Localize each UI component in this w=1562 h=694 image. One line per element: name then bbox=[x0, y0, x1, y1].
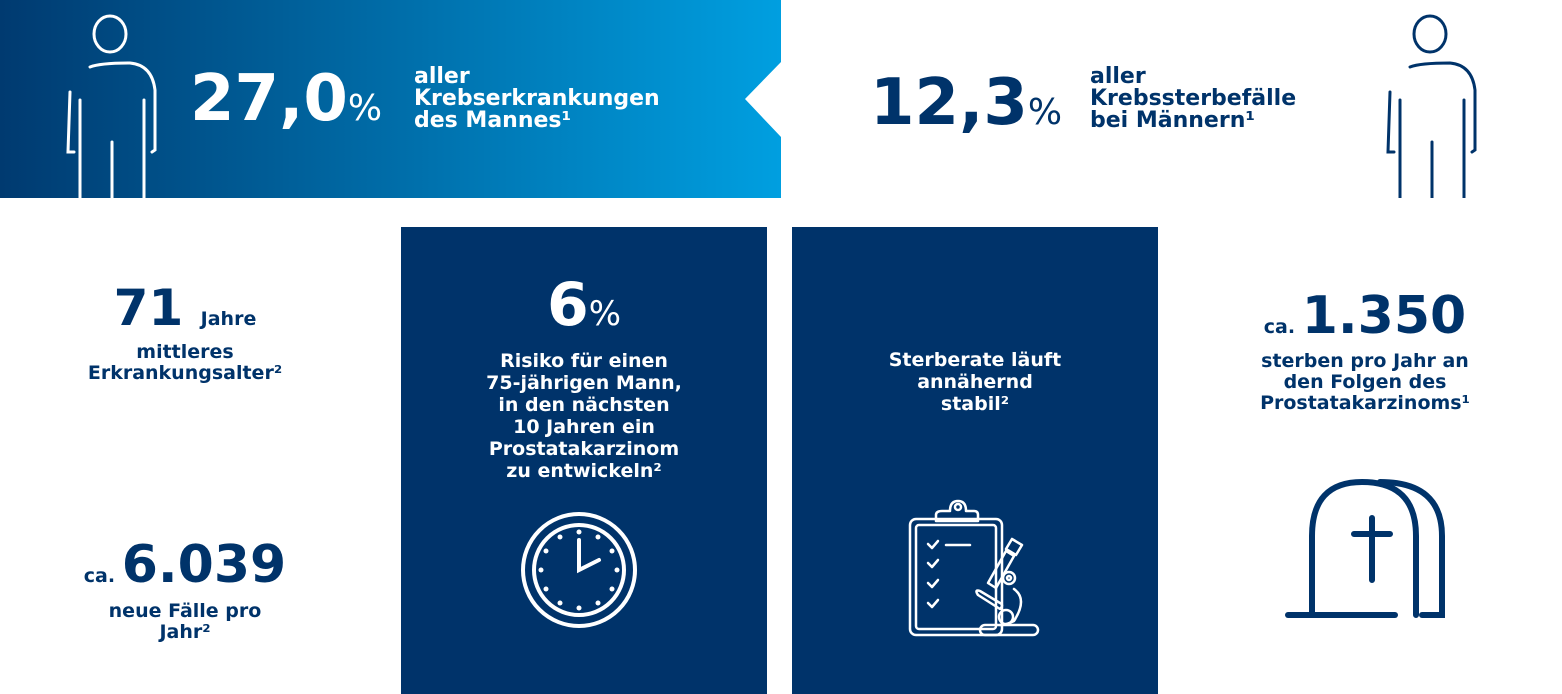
stat: 71 Jahre: Erkrankungsalter² bbox=[88, 362, 282, 384]
text: risk description: 10 Jahren ein bbox=[513, 416, 655, 438]
text: aller Krebssterbefälle bei Männern bbox=[1090, 64, 1296, 133]
stat: 12,3%: 12,3% bbox=[870, 66, 1062, 140]
stat: ca. 1.350: den Folgen des bbox=[1284, 371, 1446, 393]
text: Sterberate stabil: annähernd bbox=[917, 371, 1033, 393]
stat: ca. 1.350 bbox=[1260, 286, 1470, 414]
stat: ca. 1.350: Prostatakarzinoms¹ bbox=[1260, 392, 1470, 414]
stat: ca. 6.039 bbox=[84, 535, 286, 643]
text: Sterberate stabil bbox=[889, 349, 1061, 415]
text: aller Krebserkrankungen des Mannes bbox=[414, 66, 658, 128]
stat: ca. 6.039: neue Fälle pro bbox=[109, 600, 261, 622]
stat: 71 Jahre: mittleres bbox=[136, 341, 234, 363]
text: aller Krebssterbefälle bei Männern: aller bbox=[1090, 64, 1146, 89]
stat: ca. 1.350: ca. 1.350 bbox=[1264, 286, 1466, 346]
text: risk description: in den nächsten bbox=[498, 394, 670, 416]
panel: stable death rate bbox=[792, 227, 1158, 694]
stat: ca. 6.039: ca. 6.039 bbox=[84, 535, 286, 595]
icon: clipboard and microscope bbox=[908, 500, 1040, 636]
stat: ca. 6.039: Jahr² bbox=[159, 621, 211, 643]
text: risk description: Prostatakarzinom bbox=[489, 438, 679, 460]
icon: man outline dark bbox=[1386, 14, 1476, 198]
stat: 71 Jahre bbox=[88, 279, 282, 384]
stat: 6%: 6% bbox=[547, 270, 621, 340]
text: aller Krebserkrankungen des Mannes: aller bbox=[414, 64, 470, 89]
text: aller Krebssterbefälle bei Männern: Krebssterbefälle bbox=[1090, 86, 1296, 111]
stat: 71 Jahre: 71 Jahre bbox=[114, 279, 256, 337]
icon: clock bbox=[521, 512, 637, 628]
text: Sterberate stabil: stabil² bbox=[941, 393, 1009, 415]
text: aller Krebserkrankungen des Mannes: Krebserkrankungen bbox=[414, 86, 660, 111]
text: risk description: 75-jährigen Mann, bbox=[486, 372, 682, 394]
text: aller Krebssterbefälle bei Männern: bei Männern¹ bbox=[1090, 108, 1255, 133]
banner: incidence bbox=[0, 0, 781, 198]
text: risk description: Risiko für einen bbox=[500, 350, 668, 372]
text: aller Krebserkrankungen des Mannes: des Mannes¹ bbox=[414, 108, 571, 133]
stat: 27,0%: 27,0% bbox=[190, 62, 382, 136]
text: risk description: zu entwickeln² bbox=[506, 460, 662, 482]
text: risk description bbox=[486, 350, 682, 482]
icon: man outline bbox=[66, 14, 156, 198]
icon: gravestone bbox=[1285, 479, 1445, 618]
panel: 6% risk bbox=[401, 227, 767, 694]
text: Sterberate stabil: Sterberate läuft bbox=[889, 349, 1061, 371]
stat: ca. 1.350: sterben pro Jahr an bbox=[1261, 350, 1469, 372]
